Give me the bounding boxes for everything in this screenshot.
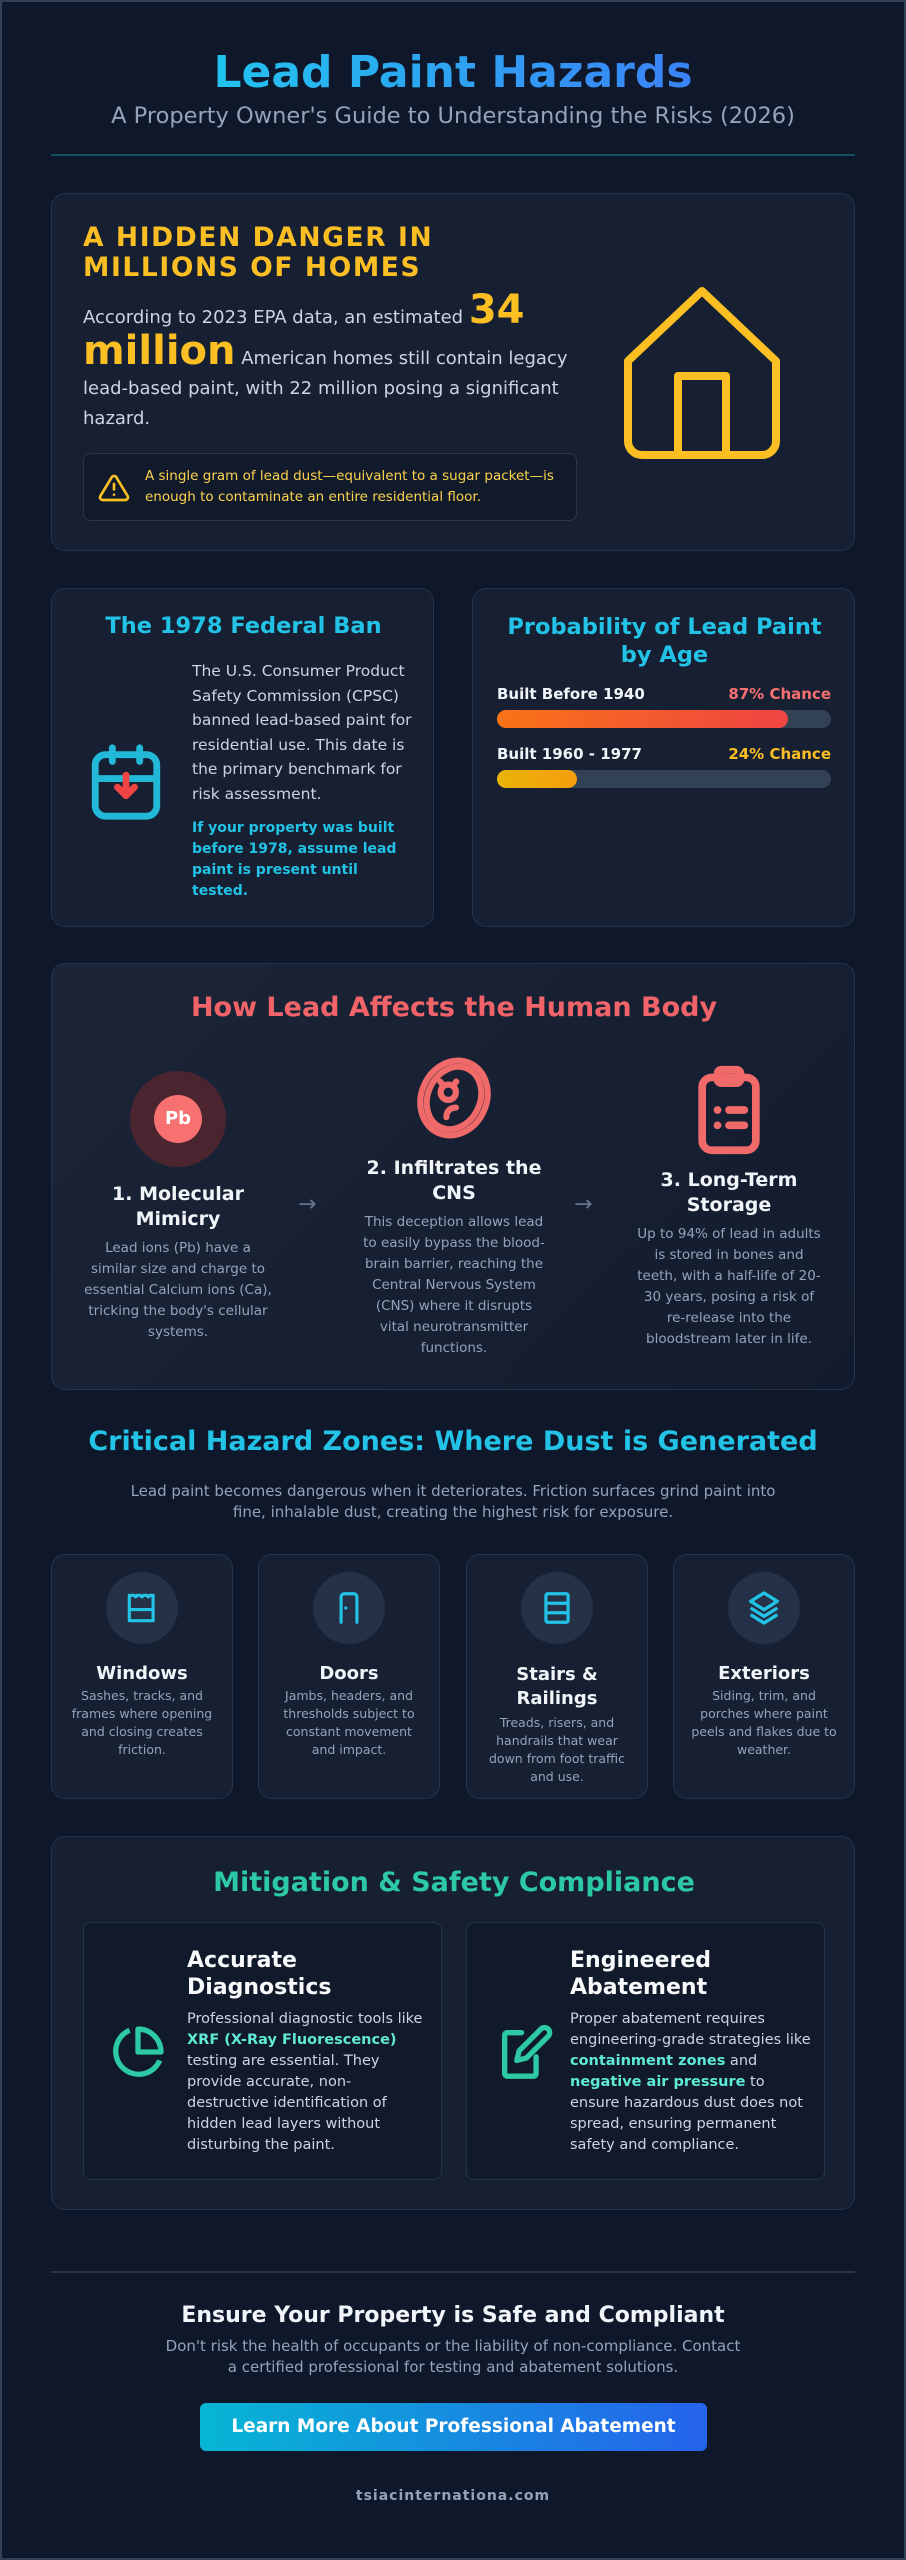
step 3: Up to 94% of lead in adults is stored in bones and teeth, with a half-life of 20-30 years, posing a risk of re-release into the bloodstream later in life.: [637, 1226, 821, 1347]
heading: Mitigation & Safety Compliance: [213, 1867, 695, 1898]
panel: windows: Windows: [96, 1663, 188, 1684]
panel: probability chart: [472, 588, 855, 927]
icon: window: [106, 1572, 178, 1644]
step 1: 1. Molecular Mimicry: [112, 1183, 244, 1230]
panel: mitigation: [51, 1836, 855, 2210]
icon: layers: [728, 1572, 800, 1644]
bar chart: [497, 685, 831, 788]
callout: A single gram of lead dust—equivalent to a sugar packet—is enough to contaminate an entire residential floor.: [145, 468, 554, 505]
button: [200, 2403, 707, 2451]
step 2: This deception allows lead to easily bypass the blood-brain barrier, reaching the Central Nervous System (CNS) where it disrupts vital neurotransmitter functions.: [363, 1214, 545, 1356]
step 2: 2. Infiltrates the CNS: [367, 1157, 541, 1204]
heading: How Lead Affects the Human Body: [191, 992, 717, 1023]
panel: stairs: Treads, risers, and handrails that wear down from foot traffic and use.: [489, 1715, 625, 1784]
card: abatement: Engineered Abatement: [570, 1948, 711, 2000]
step 3: [637, 1066, 821, 1347]
footer text: a certified professional for testing and abatement solutions.: [228, 2358, 678, 2376]
card: diagnostics: Accurate Diagnostics: [187, 1948, 331, 2000]
icon: door: [313, 1572, 385, 1644]
subtitle: A Property Owner's Guide to Understanding the Risks (2026): [111, 103, 795, 129]
panel: windows: [51, 1554, 233, 1799]
bar chart: Built Before 1940: [497, 685, 645, 703]
heading: Probability of Lead Paint: [507, 614, 822, 640]
bar chart: 87% Chance: [728, 685, 831, 703]
step 1: Lead ions (Pb) have a similar size and charge to essential Calcium ions (Ca), tricking the body's cellular systems.: [84, 1240, 272, 1340]
panel: 1978 federal ban: [51, 588, 434, 927]
heading: A HIDDEN DANGER IN MILLIONS OF HOMES: [83, 222, 433, 283]
card: diagnostics: [83, 1922, 442, 2180]
callout text: If your property was built before 1978, assume lead paint is present until tested.: [192, 820, 396, 899]
panel: stairs: [466, 1554, 648, 1799]
panel: hidden danger: [51, 193, 855, 551]
panel: exteriors: [673, 1554, 855, 1799]
icon: calendar: [92, 744, 160, 820]
panel: doors: Jambs, headers, and thresholds subject to constant movement and impact.: [283, 1688, 415, 1757]
icon: Pb atom: [130, 1071, 226, 1167]
icon: stairs: [521, 1572, 593, 1644]
bar chart: 24% Chance: [728, 745, 831, 763]
panel: stairs: Stairs &: [516, 1664, 598, 1685]
icon: clipboard: [698, 1066, 760, 1154]
title: Lead Paint Hazards: [213, 47, 693, 98]
arrow: →: [298, 1192, 316, 1217]
panel: windows: Sashes, tracks, and frames where opening and closing creates friction.: [72, 1688, 212, 1757]
panel: doors: Doors: [319, 1663, 379, 1684]
icon: edit: [502, 2024, 552, 2079]
step 3: 3. Long-Term Storage: [661, 1169, 797, 1216]
card: abatement: [466, 1922, 825, 2180]
card: abatement: Proper abatement requires engineering-grade strategies like containment zones and negative air pressure to ensure hazardous dust does not spread, ensuring permanent safety and compliance.: [570, 2011, 811, 2153]
bar chart: Built 1960 - 1977: [497, 745, 642, 763]
card: diagnostics: Professional diagnostic tools like XRF (X-Ray Fluorescence) testing are essential. They provide accurate, non-destructive identification of hidden lead layers without disturbing the paint.: [187, 2011, 422, 2153]
panel: human body: [51, 963, 855, 1390]
panel: stairs: Railings: [517, 1688, 597, 1709]
heading: The 1978 Federal Ban: [105, 613, 382, 639]
panel: doors: [258, 1554, 440, 1799]
text block: The U.S. Consumer Product Safety Commission (CPSC) banned lead-based paint for residential use. This date is the primary benchmark for risk assessment.: [192, 662, 412, 802]
step 1: [84, 1071, 272, 1340]
footer domain: tsiacinternationa.com: [356, 2488, 550, 2504]
footer heading: Ensure Your Property is Safe and Compliant: [181, 2303, 725, 2328]
footer text: Don't risk the health of occupants or the liability of non-compliance. Contact: [166, 2337, 740, 2355]
arrow: →: [574, 1192, 592, 1217]
footer text: [166, 2337, 740, 2376]
heading: hazard zones: Critical Hazard Zones: Where Dust is Generated: [88, 1426, 818, 1457]
icon: brain: [417, 1058, 491, 1138]
icon: pie chart: [113, 2026, 164, 2077]
panel: exteriors: Siding, trim, and porches where paint peels and flakes due to weather.: [691, 1688, 837, 1757]
heading: [507, 614, 822, 668]
button: Learn More About Professional Abatement: [231, 2416, 676, 2437]
step 2: [363, 1058, 545, 1356]
panel: exteriors: Exteriors: [718, 1663, 810, 1684]
icon: Pb atom: Pb: [165, 1108, 191, 1129]
text block: hazard intro: Lead paint becomes dangerous when it deteriorates. Friction surfaces grind paint into fine, inhalable dust, creating the highest risk for exposure.: [131, 1482, 775, 1521]
callout: [83, 453, 577, 521]
icon: house: [624, 287, 780, 459]
heading: by Age: [621, 642, 708, 668]
text block: statistic: According to 2023 EPA data, an estimated 34 million American homes still contain legacy lead-based paint, with 22 million posing a significant hazard.: [83, 287, 568, 429]
icon: warning: [98, 474, 130, 502]
